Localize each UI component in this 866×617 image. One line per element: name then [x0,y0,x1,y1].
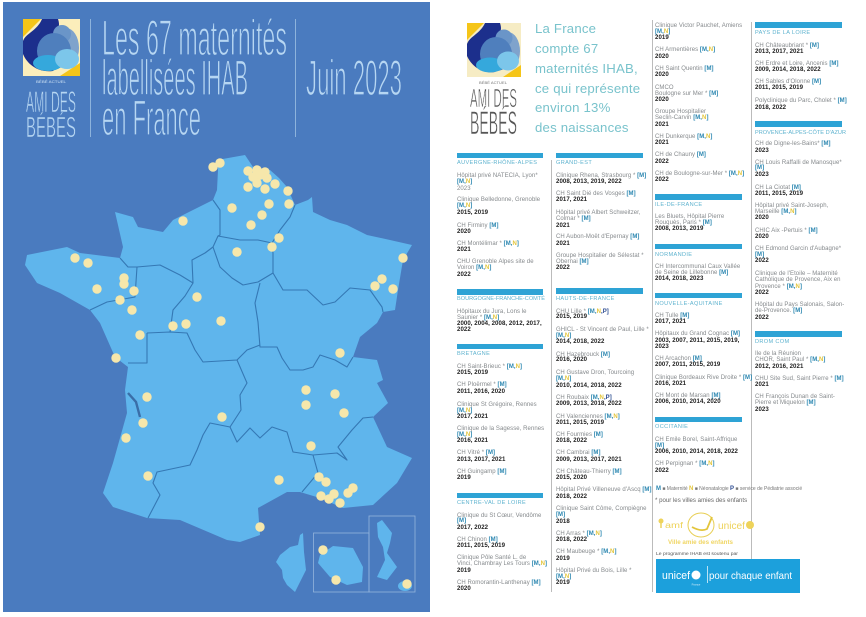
region list: Provence-Alpes-Côte d'Azur: PROVENCE-ALPES-CÔTE D'AZUR [755,129,846,136]
region list: Hauts-de-France: HAUTS-DE-FRANCE [556,296,615,302]
map of France [25,155,415,592]
region list: Centre-Val de Loire: CH Romorantin-Lanthenay [M] [457,580,541,586]
region list: Grand-Est [556,153,646,271]
unicef banner: pour chaque enfant [709,570,792,582]
region list: Occitanie: 2006, 2010, 2014, 2018, 2022 [655,448,739,455]
region list: Hauts-de-France: CH Roubaix [M,N,P] [556,395,612,401]
region list: Hauts-de-France: [M,N] [556,333,571,339]
region list: Provence-Alpes-Côte d'Azur: Catholique de Provence, Aix en [755,277,841,283]
region list: Bretagne: 2011, 2016, 2020 [457,388,506,395]
region list: Hauts-de-France: CH de Boulogne-sur-Mer * [M,N] [655,171,744,177]
intro text: ce qui représente [535,81,640,96]
region list: Hauts-de-France: [M,N] [655,29,670,35]
region list: Nouvelle-Aquitaine [655,293,752,405]
region list: Bourgogne-Franche-Comté: BOURGOGNE-FRANCHE-COMTÉ [457,295,545,302]
region list: Normandie [655,244,742,282]
region list: Hauts-de-France: 2019 [556,579,570,586]
region list: Centre-Val de Loire: [M] [457,518,466,524]
inset: Saint-Pierre-et-Miquelon [369,516,415,592]
region list: Grand-Est: Obernai [M] [556,259,589,265]
region list: Hauts-de-France: 2011, 2015, 2019 [556,419,605,426]
region list: Bretagne: Clinique de la Sagesse, Rennes [457,426,544,432]
region list: Centre-Val de Loire: 2017, 2022 [457,524,489,531]
region list: Nouvelle-Aquitaine: 2017, 2021 [655,318,687,325]
region list: Hauts-de-France: CH Maubeuge * [M,N] [556,549,617,555]
region list: Centre-Val de Loire: 2019 [457,567,471,574]
region list: Provence-Alpes-Côte d'Azur: 2022 [755,289,769,296]
region list: Bretagne: 2016, 2021 [457,437,489,444]
region list: Hauts-de-France: 2018 [556,518,570,525]
region list: Provence-Alpes-Côte d'Azur: de-Provence. [M] [755,308,802,314]
region list: Hauts-de-France: CMCO [655,85,674,91]
region list: Auvergne-Rhône-Alpes: CH Montélimar * [M,N] [457,241,519,247]
icon: Corsica [276,533,306,592]
region list: Auvergne-Rhône-Alpes: AUVERGNE-RHÔNE-ALPES [457,159,537,166]
region list: Auvergne-Rhône-Alpes: 2021 [457,246,471,253]
intro text: maternités IHAB, [535,61,638,76]
region list: Hauts-de-France: 2009, 2013, 2017, 2021 [556,456,622,463]
region list: Île-de-France: ILE-DE-FRANCE [655,202,702,208]
panel: map poster [3,2,430,612]
region list: Grand-Est: 2021 [556,240,570,247]
region list: Bretagne: [M,N] [457,432,472,438]
region list: DROM COM: 2023 [755,406,769,413]
region list: Hauts-de-France: 2020 [655,96,669,103]
region list: Hauts-de-France: Groupe Hospitalier [655,109,706,115]
region list: Hauts-de-France: 2021 [655,121,669,128]
region list: Bourgogne-Franche-Comté: Hôpitaux du Jura, Lons le [457,309,527,315]
region list: Bretagne: CH Vitré * [M] [457,450,495,456]
region list: Hauts-de-France: 2015, 2020 [556,474,588,481]
region list: Normandie: 2014, 2018, 2023 [655,275,704,282]
region list: Pays de la Loire: CH Sables d'Olonne [M] [755,79,821,85]
region list: Hauts-de-France: Hôpital Privé du Bois, Lille * [556,568,632,574]
region list: Provence-Alpes-Côte d'Azur: Hôpital du Pays Salonais, Salon- [755,302,844,308]
region list: Hauts-de-France: 2015, 2019 [556,313,588,320]
region list: Hauts-de-France: CH Hazebrouck [M] [556,352,610,358]
region list: Centre-Val de Loire: Clinique Pôle Santé L. de [457,555,527,561]
region list: Bretagne: CH Saint-Brieuc * [M,N] [457,364,522,370]
region list: Grand-Est: Groupe Hospitalier de Sélestat * [556,253,644,259]
region list: Provence-Alpes-Côte d'Azur: CH de Digne-les-Bains* [M] [755,141,831,147]
region list: Provence-Alpes-Côte d'Azur: CH Louis Raffalli de Manosque* [755,160,842,166]
region list: Provence-Alpes-Côte d'Azur [755,121,846,321]
region list: DROM COM: CH François Dunan de Saint- [755,394,835,400]
region list: Centre-Val de Loire [457,493,547,592]
region list: Hauts-de-France: CH Fourmies [M] [556,432,603,438]
region list: Bourgogne-Franche-Comté: Saunier * [M,N] [457,315,499,321]
region list: Occitanie: OCCITANIE [655,424,688,430]
region list: Provence-Alpes-Côte d'Azur: CH La Ciotat [M] [755,185,801,191]
icon: ville amie des enfants logos [658,513,754,546]
legend: M ■ Maternité N ■ Néonatalogie P ■ service de Pédiatrie associé [656,486,802,492]
region list: Auvergne-Rhône-Alpes: 2022 [457,271,471,278]
intro text [535,21,640,135]
region list: Nouvelle-Aquitaine: 2003, 2007, 2011, 2015, 2019, [655,337,740,344]
region list: Centre-Val de Loire: 2011, 2015, 2019 [457,542,506,549]
region list: Hauts-de-France: GHICL - St Vincent de Paul, Lille * [556,327,649,333]
region list: Provence-Alpes-Côte d'Azur: CHIC Aix -Pertuis * [M] [755,228,818,234]
region list: Auvergne-Rhône-Alpes: CHU Grenoble Alpes site de [457,259,534,265]
icon: ville amie des enfants logos: amf [665,521,684,530]
region list: Hauts-de-France: 2018, 2022 [556,493,588,500]
region list: Occitanie: [M] [655,443,664,449]
region list: Hauts-de-France: CH Gustave Dron, Tourcoing [556,370,634,376]
region list: Hauts-de-France: 2020 [655,53,669,60]
intro text: des naissances [535,120,629,135]
region list: Grand-Est: Hôpital privé Albert Schweitzer, [556,210,641,216]
region list: Bretagne: CH Ploërmel * [M] [457,382,507,388]
legend: * pour les villes amies des enfants [655,497,747,504]
region list: DROM COM: 2021 [755,381,769,388]
region list: Centre-Val de Loire: Clinique du St Cœur, Vendôme [457,513,542,519]
region list: Hauts-de-France: Clinique Saint Côme, Compiègne [556,506,647,512]
region list: Pays de la Loire: PAYS DE LA LOIRE [755,30,810,36]
region list: Provence-Alpes-Côte d'Azur: 2023 [755,147,769,154]
icon: ami des bébés logo [23,19,80,144]
region list: Nouvelle-Aquitaine: 2016, 2021 [655,380,687,387]
region list: Bretagne: Clinique St Grégoire, Rennes [457,402,537,408]
region list: Hauts-de-France: 2010, 2014, 2018, 2022 [556,382,622,389]
region list: Provence-Alpes-Côte d'Azur: Hôpital privé Saint-Joseph, [755,203,829,209]
region list: Nouvelle-Aquitaine: 2023 [655,343,669,350]
region list: Nouvelle-Aquitaine: Hôpitaux du Grand Cognac [M] [655,331,740,337]
region list: DROM COM: Pierre et Miquelon [M] [755,400,816,406]
region list: Pays de la Loire: 2018, 2022 [755,104,787,111]
icon: ville amie des enfants logos: unicef [718,520,745,532]
region list: Auvergne-Rhône-Alpes [457,153,543,278]
region list: DROM COM [755,331,844,413]
region list: Auvergne-Rhône-Alpes: 2015, 2019 [457,209,489,216]
region list: Occitanie: 2022 [655,467,669,474]
region list: Nouvelle-Aquitaine: CH Mont de Marsan [M] [655,393,721,399]
region list: Provence-Alpes-Côte d'Azur: 2020 [755,233,769,240]
region list: Normandie: de Seine de Lillebonne [M] [655,270,728,276]
region list: Grand-Est: Colmar * [M] [556,216,591,222]
region list: Auvergne-Rhône-Alpes: 2020 [457,228,471,235]
text: AMI DES [470,83,517,113]
region list: Provence-Alpes-Côte d'Azur: [M] [755,252,764,258]
region list: Centre-Val de Loire: CENTRE-VAL DE LOIRE [457,500,526,506]
region list: Grand-Est: Clinique Rhena, Strasbourg * [M] [556,173,646,179]
region list: Hauts-de-France: CH Saint Quentin [M] [655,66,714,72]
region list: Provence-Alpes-Côte d'Azur: [M] [755,165,764,171]
region list: Auvergne-Rhône-Alpes: Hôpital privé NATECIA, Lyon* [457,173,538,179]
region list: Hauts-de-France: Hôpital Privé Villeneuve d'Ascq [M] [556,487,652,493]
region list: Hauts-de-France: 2022 [655,158,669,165]
region list: Hauts-de-France: 2021 [655,139,669,146]
region list: Grand-Est: GRAND-EST [556,160,592,166]
region list: Hauts-de-France: CH Valenciennes [M,N] [556,414,620,420]
region list: Pays de la Loire: CH Châteaubriant * [M] [755,43,819,49]
region list: Hauts-de-France: CH Dunkerque [M,N] [655,134,712,140]
region list: DROM COM: DROM COM [755,339,790,345]
region list: DROM COM: 2012, 2016, 2021 [755,363,804,370]
region list: Normandie: CH Intercommunal Caux Vallée [655,264,741,270]
inset: La Réunion [314,533,369,592]
region list: Auvergne-Rhône-Alpes: CH Firminy [M] [457,223,499,229]
region list: Hauts-de-France: [M] [556,512,565,518]
region list: Hauts-de-France: 2022 [655,176,669,183]
icon: ami des bébés logo: BÉBÉ ACTUEL [36,79,67,84]
region list: Pays de la Loire: CH Erdre et Loire, Ancenis [M] [755,61,839,67]
region list: Bretagne: 2015, 2019 [457,369,489,376]
region list: Hauts-de-France: 2009, 2013, 2018, 2022 [556,400,622,407]
region list: Centre-Val de Loire: 2020 [457,585,471,592]
region list: Hauts-de-France: Seclin-Carvin [M,N] [655,115,708,121]
region list: Hauts-de-France [556,23,744,586]
region list: Hauts-de-France: Clinique Victor Pauchet, Amiens [655,23,742,29]
unicef banner [656,559,800,593]
region list: Grand-Est: 2021 [556,222,570,229]
region list: Provence-Alpes-Côte d'Azur: 2011, 2015, 2019 [755,190,804,197]
region list: Île-de-France: 2008, 2013, 2019 [655,225,704,232]
region list: Grand-Est: CH Saint Dié des Vosges [M] [556,191,636,197]
region list: DROM COM: Ile de la Réunion [755,351,801,357]
icon: ami des bébés logo: BÉBÉS [26,111,76,144]
region list: Bourgogne-Franche-Comté: 2022 [457,326,471,333]
region list: Hauts-de-France: CHU Lille * [M,N,P] [556,309,609,315]
region list: DROM COM: CHOR, Saint Paul * [M,N] [755,357,825,363]
region list: Auvergne-Rhône-Alpes: [M,N] [457,203,472,209]
region list: Bretagne: [M,N] [457,408,472,414]
region list: Hauts-de-France: Boulogne sur Mer * [M] [655,91,718,97]
region list: Auvergne-Rhône-Alpes: Voiron [M,N] [457,265,491,271]
region list: Hauts-de-France: [M,N] [556,574,571,580]
region list: Nouvelle-Aquitaine: 2007, 2011, 2015, 2019 [655,361,721,368]
region list: Bourgogne-Franche-Comté: 2000, 2004, 2008, 2012, 2017, [457,320,542,327]
region list: Pays de la Loire: 2011, 2015, 2019 [755,84,804,91]
region list: Hauts-de-France: CH de Chauny [M] [655,152,706,158]
panel: map poster: AMI DES [26,86,76,119]
region list: Hauts-de-France: CH Cambrai [M] [556,450,601,456]
region list: Île-de-France: Les Bluets, Hôpital Pierre [655,214,725,220]
region list: Hauts-de-France: 2019 [556,555,570,562]
region list: Pays de la Loire: 2013, 2017, 2021 [755,48,804,55]
region list: Grand-Est: CH Aubon-Moët d'Epernay [M] [556,234,639,240]
icon: ami des bébés logo (list side) [467,23,521,141]
region list: Grand-Est: 2008, 2013, 2019, 2022 [556,178,622,185]
region list: Centre-Val de Loire: Vinci, Chambray Les Tours [M,N] [457,561,547,567]
region list: Provence-Alpes-Côte d'Azur: 2023 [755,171,769,178]
text: BÉBÉS [470,105,517,141]
title: en France [102,90,201,146]
region list: DROM COM: CHU Site Sud, Saint Pierre * [M] [755,376,844,382]
region list: Nouvelle-Aquitaine: 2006, 2010, 2014, 2020 [655,398,721,405]
region list: Provence-Alpes-Côte d'Azur: Marseille [M,N] [755,209,797,215]
panel: map poster: Les 67 maternités [102,10,287,66]
region list: Grand-Est: 2017, 2021 [556,196,588,203]
region list: Hauts-de-France: CH Armentières [M,N] [655,47,715,53]
region list: Hauts-de-France: 2014, 2018, 2022 [556,338,605,345]
title [102,10,287,146]
region list: Occitanie: CH Perpignan * [M,N] [655,461,715,467]
intro text: compte 67 [535,41,598,56]
region list: Pays de la Loire: 2009, 2014, 2018, 2022 [755,66,821,73]
region list: Hauts-de-France: [M,N] [556,376,571,382]
region list: Bretagne: 2013, 2017, 2021 [457,456,506,463]
unicef banner: unicef [662,570,691,582]
region list: Provence-Alpes-Côte d'Azur: 2022 [755,314,769,321]
panel: map poster: Juin 2023 [306,50,402,106]
support note: Le programme IHAB est soutenu par [656,551,739,556]
region list: Nouvelle-Aquitaine: NOUVELLE-AQUITAINE [655,301,723,307]
region list: Centre-Val de Loire: CH Chinon [M] [457,537,498,543]
legend [655,486,802,504]
icon: ville amie des enfants logos: Ville amie des enfants [668,539,733,546]
region list: Bretagne: 2017, 2021 [457,413,489,420]
region list: Occitanie: CH Emile Borel, Saint-Affrique [655,437,738,443]
region list: Occitanie [655,417,742,474]
icon: ami des bébés logo (list side): BÉBÉ ACTUEL [479,80,508,85]
region list: Normandie: NORMANDIE [655,252,692,258]
title: labellisées IHAB [102,50,248,106]
region list: Bretagne: CH Guingamp [M] [457,469,507,475]
region list: Provence-Alpes-Côte d'Azur: CH Edmond Garcin d'Aubagne* [755,246,842,252]
intro text: environ 13% [535,100,611,115]
maternity location dots [70,158,412,589]
region list: Hauts-de-France: 2018, 2022 [556,536,588,543]
region list: Pays de la Loire: Polyclinique du Parc, Cholet * [M] [755,98,847,104]
intro text: La France [535,21,596,36]
region list: Provence-Alpes-Côte d'Azur: 2022 [755,257,769,264]
region list: Grand-Est: 2022 [556,264,570,271]
region list: Bretagne: 2019 [457,474,471,481]
region list: Hauts-de-France: 2018, 2022 [556,437,588,444]
region list: Auvergne-Rhône-Alpes: Clinique Belledonne, Grenoble [457,197,541,203]
region list: Pays de la Loire [755,22,847,111]
region list: Provence-Alpes-Côte d'Azur: Provence * [M,N] [755,284,802,290]
region list: Auvergne-Rhône-Alpes: [M,N] [457,179,472,185]
region borders [90,200,383,518]
unicef banner: France [692,582,701,586]
region list: Nouvelle-Aquitaine: CH Tulle [M] [655,313,689,319]
region list: Bretagne: BRETAGNE [457,351,490,357]
region list: Bretagne [457,344,544,481]
region list: Île-de-France: Rouquès, Paris * [M] [655,220,712,226]
region list: Provence-Alpes-Côte d'Azur: 2020 [755,214,769,221]
region list: Hauts-de-France: 2019 [655,34,669,41]
region list: Hauts-de-France: 2020 [655,71,669,78]
region list: Nouvelle-Aquitaine: CH Arcachon [M] [655,356,702,362]
region list: Hauts-de-France: 2016, 2020 [556,356,588,363]
region list: Hauts-de-France: CH Arras * [M,N] [556,531,602,537]
region list: Provence-Alpes-Côte d'Azur: Clinique de l'Etoile – Maternité [755,271,838,277]
region list: Bourgogne-Franche-Comté [457,289,545,333]
region list: Île-de-France [655,194,742,232]
region list: Nouvelle-Aquitaine: Clinique Bordeaux Rive Droite * [M] [655,375,752,381]
region list: Auvergne-Rhône-Alpes: 2023 [457,186,471,192]
region list: Hauts-de-France: CH Château-Thierry [M] [556,469,622,475]
